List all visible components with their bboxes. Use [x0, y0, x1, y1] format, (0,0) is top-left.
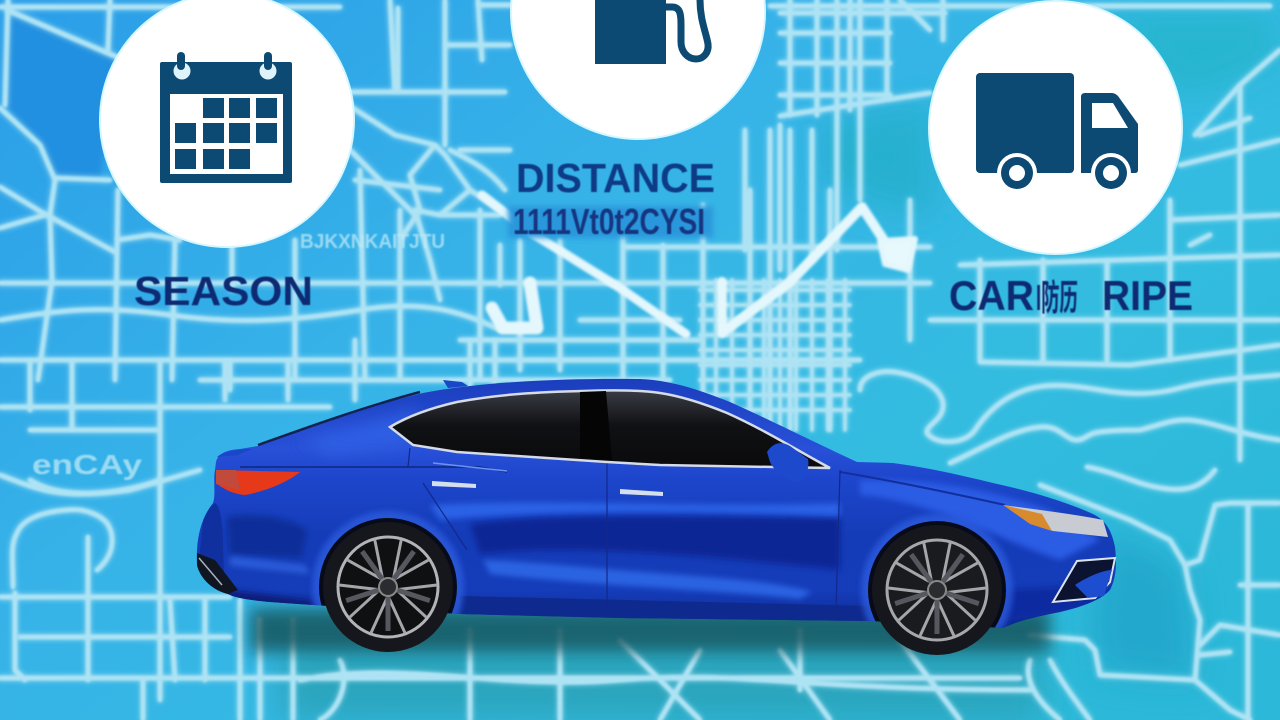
headlight — [1003, 505, 1108, 537]
garbled distance subtitle: 1111Vt0t2CYSI — [513, 201, 705, 242]
rear wheel — [323, 522, 453, 652]
mirror — [767, 443, 808, 482]
truck icon circle — [929, 1, 1182, 254]
window pillar — [580, 391, 612, 460]
label: car type: RIPE — [1102, 272, 1193, 319]
car — [197, 379, 1116, 666]
label: car type: I防历 — [1036, 277, 1078, 318]
door seams — [408, 448, 840, 612]
icon: calendar — [160, 52, 292, 183]
roof edge — [258, 392, 420, 445]
arrow: right arrowhead — [880, 239, 915, 270]
front intake — [1053, 558, 1115, 602]
arrow: ascending route — [722, 207, 887, 333]
icon: delivery truck — [976, 73, 1138, 193]
label: car type — [949, 272, 1193, 319]
route arrows — [482, 195, 915, 334]
wheel arches — [310, 510, 466, 614]
door handles — [432, 481, 663, 496]
tail lamp — [216, 470, 300, 495]
front wheel — [872, 525, 1002, 655]
icon: fuel pump — [595, 0, 708, 64]
exhaust — [197, 553, 238, 594]
rear spoiler and antenna — [217, 380, 468, 457]
faint map labels — [32, 231, 445, 480]
label: car type: CAR — [949, 272, 1034, 319]
faint map labels: BJKXNKAITJTU — [300, 231, 445, 253]
arrow: left arrowhead — [492, 283, 537, 328]
windows — [390, 390, 830, 468]
ground shadow — [250, 608, 1050, 652]
distance icon circle — [511, 0, 765, 139]
faint map labels: enCAy — [32, 449, 143, 480]
shoulder line — [240, 467, 507, 472]
season icon circle — [100, 0, 354, 247]
body shading — [198, 410, 1110, 666]
label: distance: DISTANCE — [516, 155, 715, 201]
car body — [197, 379, 1116, 628]
label: season: SEASON — [134, 268, 313, 314]
label: distance — [508, 155, 715, 242]
arrow: descending route — [482, 195, 686, 334]
